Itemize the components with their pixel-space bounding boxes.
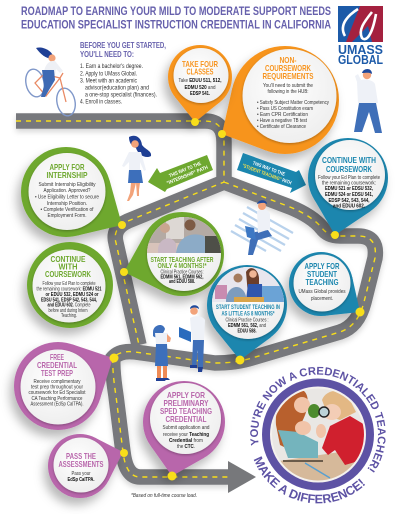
text block: before you get started [80, 41, 166, 106]
pin: continue with coursework (student teaching): Follow your Ed Plan to complete [318, 175, 380, 181]
pin: free credential test prep: coursework for Ed Specialist [28, 390, 86, 396]
pin: apply for preliminary sped teaching credential [143, 381, 225, 480]
pin: take four classes [168, 45, 232, 126]
illustration: man on phone [354, 69, 382, 133]
illustration: cyclist [23, 47, 78, 118]
pin: pass the assessments: EdSp CalTPA. [68, 477, 95, 483]
illustration: walking woman [122, 136, 151, 201]
pin: non-coursework requirements: COURSEWORK [265, 64, 311, 73]
pin: start student teaching: EDMM 561, 562, and [228, 323, 266, 329]
pin: non-coursework requirements: • Have a negative TB test [257, 118, 307, 124]
pin: take four classes: CLASSES [186, 68, 214, 76]
badge: you're now a credentialed teacher: MAKE A DIFFERENCE! [254, 456, 365, 504]
pin: non-coursework requirements [218, 46, 339, 154]
pin: non-coursework requirements: • Earn CPR Certification [257, 112, 308, 118]
pin: take four classes: EDMU 520 and [184, 85, 216, 91]
pin: pass the assessments: ASSESSMENTS [58, 460, 104, 469]
pin: continue with coursework (internship): WITH [58, 262, 78, 272]
pin: take four classes: TAKE FOUR [182, 60, 218, 69]
pin: free credential test prep: Receive complimentary [34, 379, 81, 385]
text block: before you get started: a one-stop specialist (finances). [85, 92, 157, 98]
pin: apply for internship: Employment Form. [48, 213, 86, 219]
pin: free credential test prep: Assessment (EdSp CalTPA). [30, 402, 84, 408]
photo: teacher and child with magnifier [272, 388, 364, 480]
arrow: this way to the internship path: "INTERNSHIP" PATH [166, 165, 209, 187]
pin: continue with coursework (internship) [27, 242, 113, 328]
pin: continue with coursework (student teaching): EDMU 524 or EDSU 541, [325, 192, 374, 198]
pin: apply for internship: Application. Approved? [44, 188, 90, 194]
arrow: this way to the student teaching path [237, 153, 306, 193]
arrow: road end [228, 461, 256, 493]
pin: apply for preliminary sped teaching credential: SPED TEACHING [160, 407, 212, 416]
pin: apply for internship: • Complete Verification of [40, 207, 94, 213]
footnote: *Based on full-time course load. [131, 493, 197, 499]
logo: UMass Global: UMASS [338, 43, 383, 57]
pin: free credential test prep: FREE [50, 353, 64, 362]
pin: continue with coursework (internship): CONTINUE [50, 255, 86, 264]
pin: apply for student teaching: APPLY FOR [304, 262, 340, 271]
pin: apply for preliminary sped teaching credential: the CTC. [177, 444, 195, 450]
pin: free credential test prep: TEST PREP [41, 369, 73, 378]
arrow: this way to the student teaching path: THIS WAY TO THE [252, 160, 286, 178]
illustration: two people talking [153, 305, 205, 381]
pin: apply for internship [21, 147, 126, 237]
pin: apply for preliminary sped teaching credential: CREDENTIAL [166, 415, 206, 424]
pin: start student teaching: Clinical Practice Courses : [226, 318, 268, 324]
pin: start student teaching [207, 265, 287, 364]
pin: continue with coursework (internship): Teaching. [61, 313, 77, 319]
pin: pass the assessments: Pass your [72, 471, 91, 477]
pin: continue with coursework (internship): COURSEWORK [45, 270, 91, 279]
pin: apply for internship: APPLY FOR [50, 163, 85, 172]
photo: teachers at table [145, 217, 225, 253]
text block: before you get started: 1. Earn a bachelor's degree. [80, 64, 143, 70]
pin: apply for preliminary sped teaching credential: receive your Teaching [163, 432, 209, 438]
pin: apply for internship: • Use Eligibility Letter to secure [35, 194, 99, 200]
pin: non-coursework requirements: NON- [280, 56, 297, 65]
title [21, 4, 331, 32]
pin: continue with coursework (student teaching): the remaining coursework: [322, 180, 376, 186]
pin: pass the assessments [48, 434, 128, 498]
pin: apply for student teaching [289, 252, 364, 316]
pin: continue with coursework (student teaching): COURSEWORK [326, 165, 372, 174]
pin: pass the assessments: PASS THE [66, 452, 96, 461]
pin: apply for student teaching: UMass Global provides [298, 289, 346, 295]
pin: apply for preliminary sped teaching credential: Credential from [169, 438, 203, 444]
pin: continue with coursework (internship): or EDUU 532, EDMU 524 or [46, 292, 99, 298]
badge: you're now a credentialed teacher: YOU'RE NOW A CREDENTIALED TEACHER! [250, 366, 386, 473]
pin: start teaching after only 4 months: ONLY 4 MONTHS!* [158, 263, 207, 270]
pin: apply for internship: INTERNSHIP [46, 171, 88, 180]
pin: apply for student teaching: placement. [311, 296, 333, 302]
text block: before you get started: advisor(education plan) and [85, 86, 149, 92]
text block: before you get started: BEFORE YOU GET STARTED, [80, 41, 166, 50]
pin: start teaching after only 4 months: Clinical Practice Courses: [160, 270, 204, 276]
pin: apply for preliminary sped teaching credential: PRELIMINARY [164, 399, 209, 408]
pin: start teaching after only 4 months [120, 212, 225, 296]
pin: continue with coursework (internship): before and during Intern [48, 308, 88, 314]
pin: apply for student teaching: TEACHING [306, 278, 338, 287]
pin: continue with coursework (internship): the remaining coursework: EDMU 521 [36, 286, 102, 292]
pin: start student teaching: START STUDENT TEACHING IN [216, 304, 280, 311]
arrow: this way to the student teaching path: "STUDENT TEACHING" PATH [241, 163, 292, 187]
pin: continue with coursework (student teaching) [308, 138, 388, 239]
pin: free credential test prep: CREDENTIAL [37, 361, 77, 370]
pin: continue with coursework (internship): Follow your Ed Plan to complete [42, 281, 96, 287]
pin: take four classes: EDSP 541. [190, 91, 210, 97]
arrow: this way to the internship path: THIS WAY TO THE [168, 161, 203, 179]
logo: UMass Global [338, 6, 383, 67]
pin: start student teaching: EDUU 588. [238, 328, 257, 334]
pin: non-coursework requirements: REQUIREMENTS [262, 72, 314, 81]
pin: non-coursework requirements: following in the HUB: [268, 89, 308, 95]
pin: apply for internship: Submit Internship Eligibility [38, 182, 96, 188]
text block: before you get started: 3. Meet with an academic [80, 78, 137, 84]
arrow: this way to the internship path [148, 155, 213, 192]
pin: start teaching after only 4 months: START TEACHING AFTER [150, 257, 214, 264]
pin: apply for internship: Internship Position. [47, 201, 87, 207]
pin: non-coursework requirements: You'll need to submit the [263, 83, 313, 89]
pin: start teaching after only 4 months: EDMM 561, EDMM 562, [160, 274, 204, 280]
pin: start teaching after only 4 months: and EDUU 588. [169, 279, 195, 285]
pin: apply for student teaching: STUDENT [307, 270, 337, 279]
pin: apply for preliminary sped teaching credential: Submit application and [162, 425, 210, 431]
text block: before you get started: 4. Enroll in classes. [80, 100, 122, 106]
text block: before you get started: YOU'LL NEED TO: [80, 50, 134, 59]
pin: start student teaching: AS LITTLE AS 8 MONTHS* [222, 310, 275, 318]
pin: apply for preliminary sped teaching credential: APPLY FOR [167, 391, 205, 400]
pin: free credential test prep [14, 342, 118, 430]
pin: continue with coursework (internship): EDSU 541, EDSP 542, 543, 544, [41, 298, 97, 304]
text block: before you get started: 2. Apply to UMass Global. [80, 72, 137, 78]
pin: continue with coursework (student teaching): and EDUU 602. [333, 204, 366, 210]
pin: continue with coursework (student teaching): CONTINUE WITH [322, 156, 376, 165]
pin: continue with coursework (internship): and EDUU 602. Complete [48, 302, 91, 308]
pin: continue with coursework (student teaching): EDSP 542, 543, 544, [328, 198, 370, 204]
logo: UMass Global: GLOBAL [338, 53, 383, 67]
pin: free credential test prep: CA Teaching Performance [32, 396, 82, 402]
pin: take four classes: Take EDUU 511, 512, [178, 78, 222, 84]
pin: non-coursework requirements: • Pass US Constitution exam [257, 106, 313, 112]
illustration: man on bench with laptop [231, 200, 293, 255]
road network [16, 121, 375, 493]
photo: children and teacher [212, 266, 286, 302]
pin: continue with coursework (student teaching): EDMU 521 or EDSU 532, [325, 186, 374, 192]
pin: non-coursework requirements: • Certificate of Clearance [257, 124, 306, 130]
pin: free credential test prep: test prep throughout your [31, 384, 83, 390]
pin: non-coursework requirements: • Satisfy Subject Matter Competency [257, 100, 329, 106]
